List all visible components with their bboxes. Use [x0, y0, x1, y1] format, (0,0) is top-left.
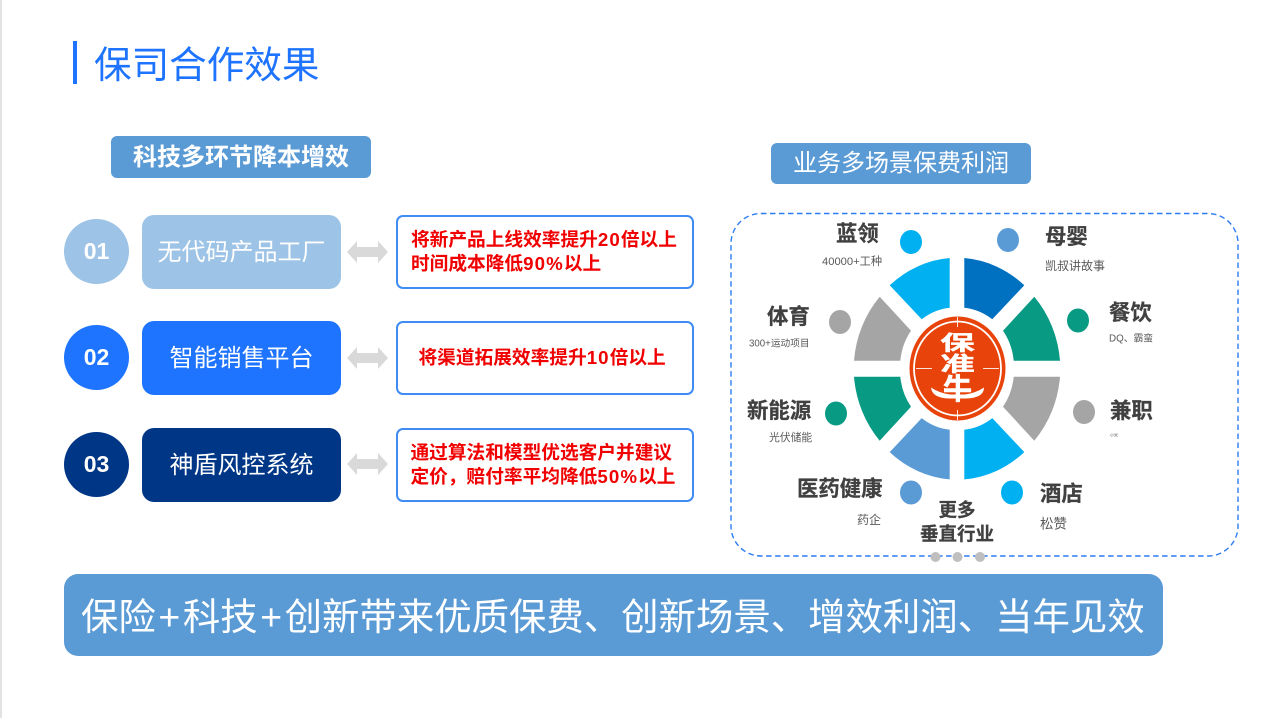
label: 母婴 — [1045, 225, 1105, 273]
badge 01: 01 — [84, 238, 109, 264]
product label: risk control system: 神盾风控系统 — [170, 452, 314, 478]
label: 蓝领: 蓝领 — [836, 222, 879, 246]
badge 03: 03 — [84, 451, 109, 477]
result box 3 — [396, 428, 694, 502]
label: 新能源: 新能源 — [747, 399, 812, 423]
result box 3: 通过算法和模型优选客户并建议 — [410, 442, 672, 463]
product label: risk control system — [142, 428, 341, 502]
arrow 1 — [347, 241, 388, 263]
badge 01 — [64, 219, 129, 284]
pagination dots — [930, 552, 985, 562]
heading: right section — [771, 143, 1031, 184]
product label: smart sales platform: 智能销售平台 — [170, 344, 314, 372]
label: 医药健康 — [797, 476, 883, 527]
logo: 保准牛: 准 — [940, 353, 975, 375]
label: 体育 — [749, 304, 810, 350]
heading: left section: 科技多环节降本增效 — [133, 144, 349, 170]
label: 体育: 300+运动项目 — [749, 338, 810, 350]
logo: 保准牛: 牛 — [943, 373, 972, 406]
badge 02: 02 — [84, 344, 109, 370]
label: 餐饮: 餐饮 — [1109, 301, 1152, 325]
label: 更多垂直行业 — [920, 500, 994, 544]
category dots — [825, 228, 1095, 504]
badge 02 — [64, 325, 129, 390]
label: 体育: 体育 — [767, 304, 810, 329]
logo: 保准牛 — [910, 316, 1006, 420]
arrow 3 — [347, 453, 388, 475]
label: 母婴: 母婴 — [1045, 225, 1088, 249]
badge 03 — [64, 432, 129, 497]
product label: smart sales platform — [142, 321, 341, 395]
result box 3: 定价，赔付率平均降低50%以上 — [410, 466, 675, 487]
label: 蓝领 — [822, 222, 882, 268]
label: 新能源: 光伏储能 — [769, 430, 812, 444]
label: 兼职 — [1110, 399, 1153, 438]
label: 母婴: 凯叔讲故事 — [1045, 258, 1105, 273]
label: 酒店: 松赞 — [1040, 516, 1067, 532]
label: 餐饮 — [1109, 301, 1153, 344]
label: 兼职: 兼职 — [1110, 399, 1153, 423]
label: 新能源 — [747, 399, 812, 444]
result box 1: 将新产品上线效率提升20倍以上 — [411, 228, 677, 250]
bottom summary banner: 保险+科技+创新带来优质保费、创新场景、增效利润、当年见效 — [81, 596, 1145, 638]
label: 更多垂直行业: 垂直行业 — [920, 524, 994, 544]
heading: right section: 业务多场景保费利润 — [793, 150, 1009, 177]
dashed frame — [731, 214, 1238, 556]
result box 2: 将渠道拓展效率提升10倍以上 — [418, 347, 666, 368]
label: 兼职: 小米 — [1110, 432, 1118, 438]
product label: no-code factory — [142, 215, 341, 289]
label: 餐饮: DQ、霸蛮 — [1109, 332, 1153, 344]
label: 更多垂直行业: 更多 — [938, 500, 976, 520]
product label: no-code factory: 无代码产品工厂 — [158, 238, 326, 266]
label: 医药健康: 药企 — [857, 512, 881, 527]
label: 酒店 — [1040, 482, 1083, 532]
heading: left section — [111, 136, 371, 178]
bottom summary banner — [64, 574, 1163, 656]
wheel segments — [854, 258, 1060, 479]
label: 蓝领: 40000+工种 — [822, 254, 882, 268]
result box 2 — [396, 321, 694, 395]
logo: 保准牛: 保 — [940, 332, 976, 354]
result box 1: 时间成本降低90%以上 — [411, 252, 601, 274]
label: 酒店: 酒店 — [1040, 482, 1083, 506]
label: 医药健康: 医药健康 — [797, 476, 883, 501]
title: 保司合作效果 — [94, 44, 319, 86]
arrow 2 — [347, 347, 388, 369]
result box 1 — [396, 215, 694, 289]
